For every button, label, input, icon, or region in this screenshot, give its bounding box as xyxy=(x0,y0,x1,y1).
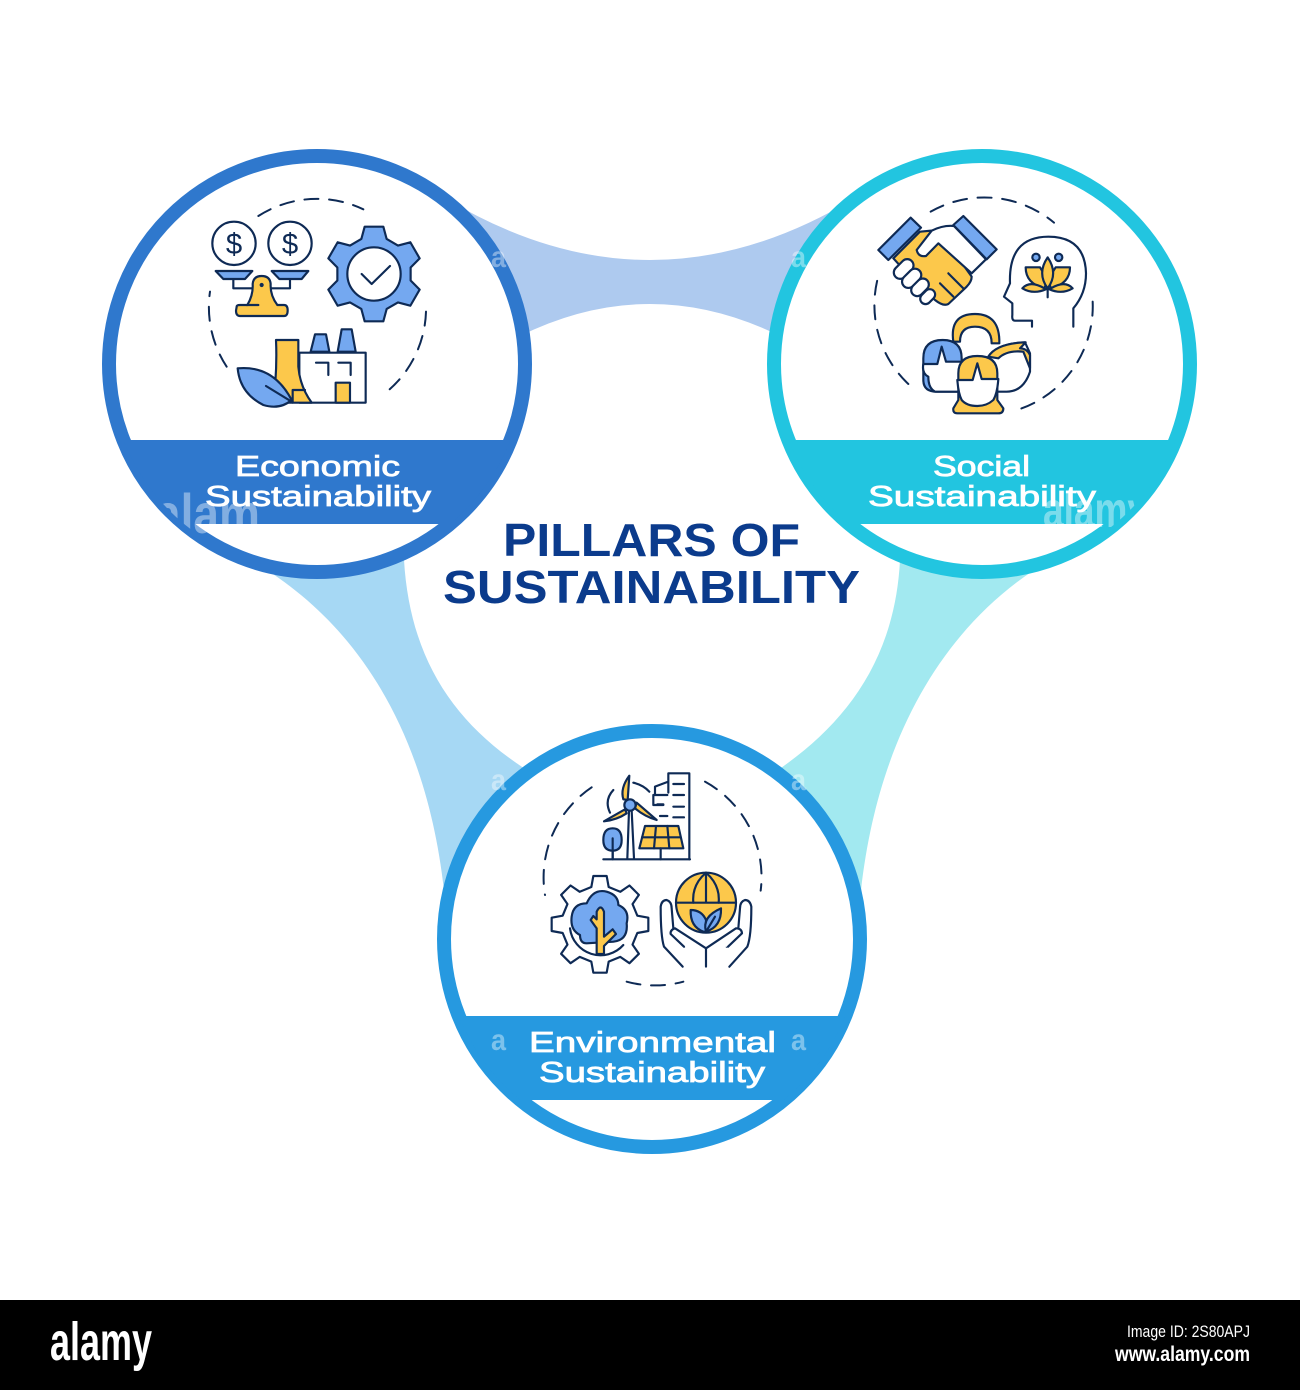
watermarks: a xyxy=(491,241,506,274)
watermarks: a xyxy=(791,241,806,274)
label: environmental: Environmental xyxy=(529,1027,776,1059)
icon group: environmental xyxy=(544,773,762,985)
icon: gear with tree xyxy=(552,876,648,973)
watermarks: a xyxy=(491,764,506,797)
label: economic: Sustainability xyxy=(205,481,432,513)
dashed ring: environmental xyxy=(544,782,762,985)
icon: head with lotus xyxy=(1004,237,1086,327)
circle: social xyxy=(774,156,1190,572)
label: social: Social xyxy=(933,451,1030,483)
dashed ring: economic xyxy=(209,199,426,395)
banner: economic xyxy=(131,440,503,524)
watermarks: alamy xyxy=(1043,482,1148,538)
label: economic: Economic xyxy=(235,451,400,483)
banner: social xyxy=(796,440,1168,524)
pillar: environmental sustainability xyxy=(437,731,867,1147)
label: social: Sustainability xyxy=(868,481,1097,513)
banner: environmental xyxy=(466,1016,838,1100)
watermarks: alam xyxy=(155,482,260,545)
pillar: social sustainability xyxy=(767,156,1197,572)
label: environmental: Sustainability xyxy=(539,1057,766,1089)
footer bar xyxy=(0,1300,1300,1390)
icon: handshake xyxy=(878,216,997,306)
circle: economic xyxy=(109,156,525,572)
icon group: social xyxy=(874,197,1093,413)
watermarks: a xyxy=(491,1024,506,1057)
icon: globe in hands xyxy=(661,873,751,967)
footer logo: alamy xyxy=(50,1312,152,1372)
icon: balance scale with coins xyxy=(212,222,312,316)
label: social xyxy=(868,451,1097,513)
watermarks xyxy=(155,241,1148,1057)
icon: group of people xyxy=(923,314,1030,413)
icon: balance scale with coins: $ xyxy=(226,228,242,261)
footer url: www.alamy.com xyxy=(1114,1343,1250,1366)
connector: economic to social xyxy=(445,198,855,336)
dashed ring: social xyxy=(874,197,1093,409)
label: economic xyxy=(205,451,432,513)
connector: economic to environmental xyxy=(250,560,530,900)
icon: gear with check xyxy=(328,227,420,321)
circle: environmental xyxy=(444,731,860,1147)
icon: factory with leaf xyxy=(238,329,366,407)
pillar: economic sustainability xyxy=(102,156,532,572)
icon: balance scale with coins: $ xyxy=(282,228,298,261)
title: SUSTAINABILITY xyxy=(443,561,860,613)
title: PILLARS OF xyxy=(503,514,800,566)
connector: social to environmental xyxy=(775,560,1050,900)
footer image id: Image ID: 2S80APJ xyxy=(1127,1322,1250,1341)
title xyxy=(443,514,860,613)
watermarks: a xyxy=(791,1024,806,1057)
icon: wind turbine, city and solar panel xyxy=(603,773,690,859)
watermarks: a xyxy=(791,764,806,797)
label: environmental xyxy=(529,1027,776,1089)
icon group: economic xyxy=(209,199,426,407)
